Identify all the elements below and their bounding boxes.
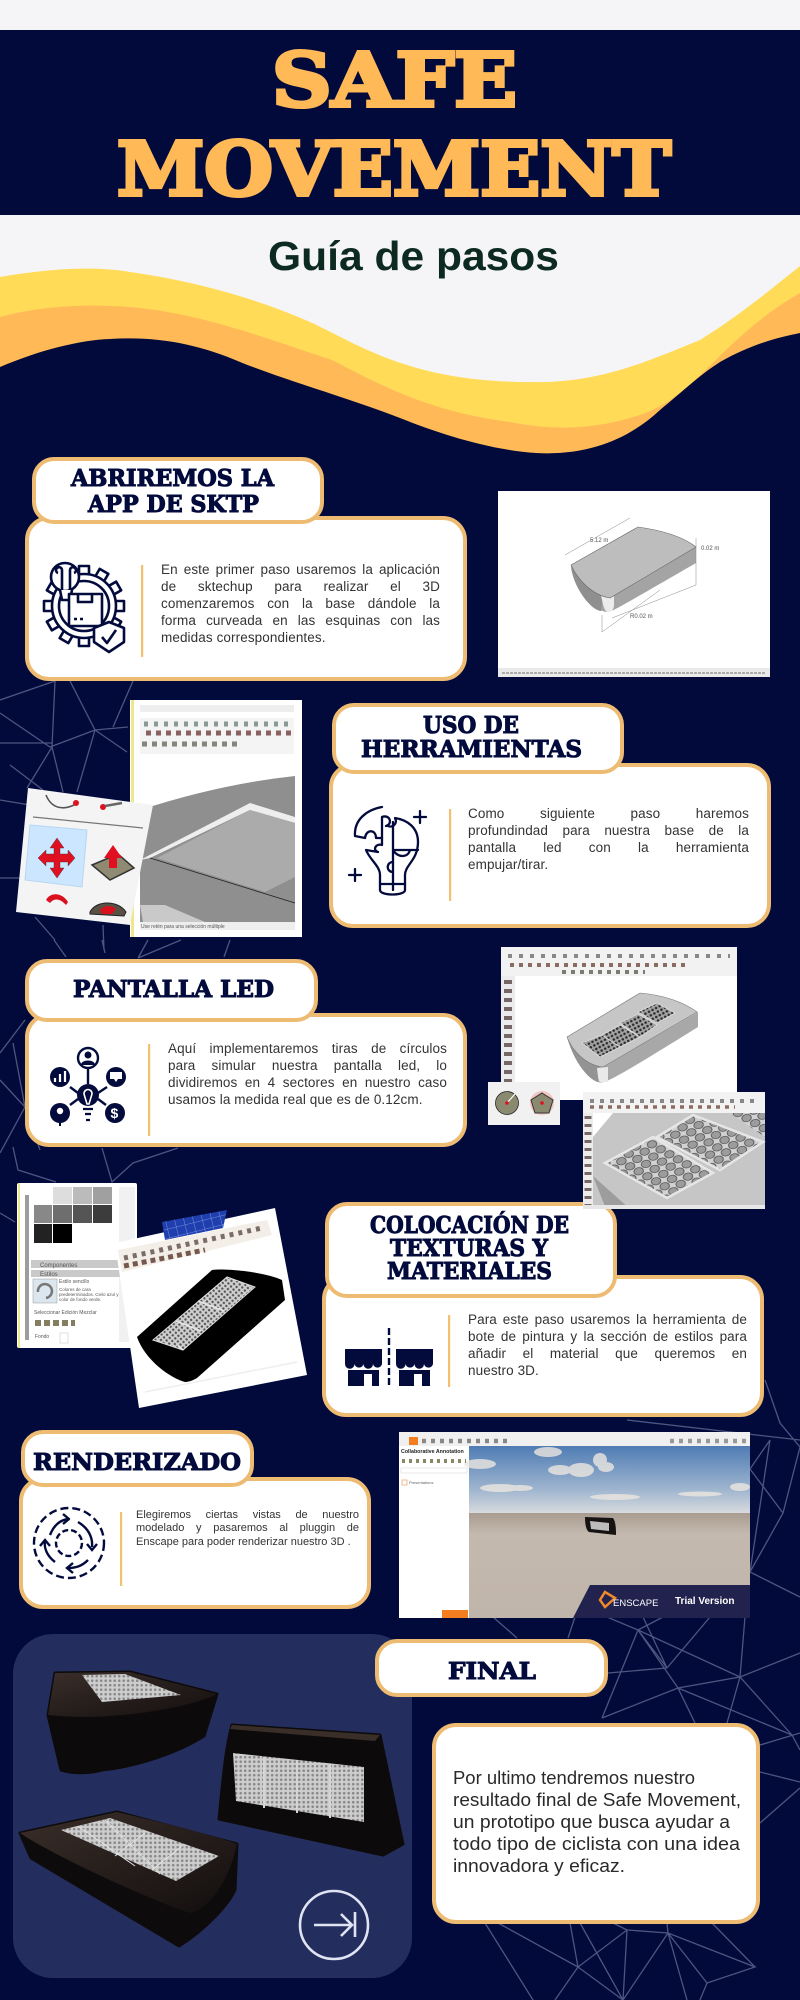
- image: enscape render screenshot: [399, 1432, 750, 1618]
- panel: step 1 abriremos la app: [27, 459, 465, 679]
- text block: step 5: Elegiremos ciertas vistas de nuestro: [136, 1508, 359, 1520]
- title: MOVEMENT: [117, 127, 671, 213]
- image: led circles close-up screenshot: [583, 1092, 765, 1209]
- text block: step 3: para simular nuestra pantalla led, lo: [168, 1058, 447, 1072]
- icon: arrow in circle: [300, 1891, 368, 1959]
- title: SAFE: [272, 38, 517, 124]
- text block: final: [453, 1767, 741, 1876]
- image: sketchup push pull screenshot: [130, 700, 302, 937]
- image: render front view: [219, 1725, 403, 1855]
- divider: [449, 809, 451, 901]
- icon: network of ideas: [50, 1048, 126, 1126]
- heading: final: FINAL: [448, 1658, 536, 1685]
- image: rotated black textured model: [115, 1208, 307, 1408]
- image: styles palette screenshot: predeterminados. Cielo azul y: [59, 1292, 119, 1297]
- text block: step 1: medidas correspondientes.: [161, 630, 326, 644]
- panel: step 4 texturas y materiales: [324, 1204, 762, 1415]
- text block: step 4: nuestro 3D.: [468, 1362, 539, 1378]
- heading: step 4: COLOCACIÓN DE: [370, 1212, 569, 1239]
- text block: step 3: [168, 1040, 447, 1114]
- heading: step 1: ABRIREMOS LA: [70, 465, 275, 492]
- panel: step 5 renderizado: [21, 1432, 369, 1607]
- image: styles palette screenshot: Componentes: [40, 1263, 77, 1269]
- image: sketchup led model screenshot: [501, 947, 737, 1100]
- wave: navy lower edge: [0, 333, 800, 520]
- text block: final: innovadora y eficaz.: [453, 1855, 625, 1876]
- text block: step 1: [161, 560, 440, 650]
- text block: step 2: pantalla led con la herramienta: [468, 840, 749, 854]
- image: styles palette screenshot: [17, 1183, 137, 1348]
- image: render angled view: [20, 1812, 237, 1946]
- wave: orange band: [0, 293, 800, 470]
- panel: final heading: [377, 1641, 606, 1695]
- text block: final: resultado final de Safe Movement,: [453, 1789, 741, 1810]
- text block: step 4: Para este paso usaremos la herramienta de: [468, 1312, 747, 1326]
- divider: [141, 565, 143, 657]
- heading: step 2: USO DE: [423, 712, 519, 739]
- panel: final text: [434, 1725, 758, 1922]
- image: base 3D model screenshot: 5.12 m: [590, 538, 608, 544]
- image: styles palette screenshot: Estilos: [40, 1272, 58, 1278]
- heading: step 4: MATERIALES: [387, 1258, 552, 1285]
- image: circle tool detail: [488, 1082, 560, 1125]
- heading: step 4: TEXTURAS Y: [390, 1235, 549, 1262]
- header: navy title band: [0, 30, 800, 215]
- text block: final: Por ultimo tendremos nuestro: [453, 1767, 695, 1788]
- wave: light area: [0, 215, 800, 460]
- icon: split storefront: [345, 1328, 433, 1386]
- image: base 3D model screenshot: [498, 491, 770, 677]
- text block: final: un prototipo que busca ayudar a: [453, 1811, 731, 1832]
- text block: step 5: Enscape para poder renderizar nuestro 3D .: [136, 1536, 351, 1548]
- panel: step 3 pantalla led: [27, 961, 465, 1145]
- text block: step 2: [468, 804, 749, 884]
- heading: step 2: HERRAMIENTAS: [361, 736, 582, 763]
- icon: gear with bulb and shield: [44, 563, 124, 652]
- text block: step 4: añadir el material que queremos en: [468, 1346, 747, 1360]
- text block: step 4: bote de pintura y la sección de estilos para: [468, 1328, 747, 1344]
- text block: step 1: de sktechup para realizar el 3D: [161, 578, 440, 594]
- text block: step 1: En este primer paso usaremos la aplicación: [161, 562, 440, 576]
- text block: step 2: empujar/tirar.: [468, 856, 548, 872]
- image: base 3D model screenshot: 0.02 m: [701, 546, 719, 552]
- image: styles palette screenshot: color de fondo verde.: [59, 1297, 101, 1302]
- image: styles palette screenshot: Estilo sencillo: [59, 1279, 90, 1285]
- image: base 3D model screenshot: R0.02 m: [630, 614, 653, 620]
- icon: puzzle light bulb: [349, 807, 426, 894]
- heading: step 2: [361, 712, 582, 763]
- icon: network of ideas: $: [110, 1105, 118, 1121]
- text block: step 1: forma curveada en las esquinas con las: [161, 612, 440, 628]
- divider: [448, 1315, 450, 1387]
- title: [117, 38, 671, 213]
- subtitle: Guía de pasos: [268, 233, 559, 279]
- image: enscape render screenshot: Collaborative Annotation: [401, 1449, 464, 1455]
- image: render top view: [48, 1672, 217, 1773]
- text block: step 3: Aquí implementaremos tiras de círculos: [168, 1040, 447, 1056]
- text block: step 2: profundindad para nuestra base de la: [468, 822, 749, 838]
- text block: step 2: Como siguiente paso haremos: [468, 806, 749, 820]
- wave: yellow band: [0, 266, 800, 470]
- image: styles palette screenshot: Colores de cara: [59, 1287, 91, 1292]
- image: enscape render screenshot: ENSCAPE: [613, 1598, 658, 1609]
- image: styles palette screenshot: Seleccionar Edición Mezclar: [34, 1310, 97, 1316]
- panel: final renders: [13, 1634, 412, 1978]
- text block: step 3: usamos la medida real que es de 0.12cm.: [168, 1092, 423, 1106]
- icon: dashed circular arrows: [34, 1508, 104, 1578]
- text block: step 4: [468, 1310, 747, 1386]
- divider: [120, 1512, 122, 1586]
- image: styles palette screenshot: Fondo: [35, 1334, 49, 1340]
- panel: step 2 uso de herramientas: [331, 705, 769, 926]
- text block: step 5: [136, 1508, 359, 1554]
- text block: step 5: modelado y pasaremos al pluggin de: [136, 1522, 359, 1534]
- heading: step 5: RENDERIZADO: [33, 1449, 241, 1476]
- text block: final: todo tipo de ciclista con una idea: [453, 1833, 741, 1854]
- text block: step 3: dividiremos en 4 sectores en nuestro caso: [168, 1074, 447, 1090]
- text block: step 1: comenzaremos con la base dándole la: [161, 596, 440, 610]
- heading: step 3: PANTALLA LED: [73, 976, 274, 1003]
- heading: step 1: APP DE SKTP: [87, 491, 259, 518]
- image: enscape render screenshot: Presentations: [409, 1480, 433, 1485]
- image: enscape render screenshot: Trial Version: [675, 1596, 734, 1607]
- image: sketchup push pull screenshot: Use retén para una selección múltiple: [141, 924, 225, 930]
- background network lines: [0, 681, 800, 2000]
- divider: [148, 1044, 150, 1136]
- image: rotated push pull icons: [16, 788, 153, 925]
- header: top light band: [0, 0, 800, 30]
- heading: step 1: [70, 465, 275, 518]
- heading: step 4: [370, 1212, 569, 1285]
